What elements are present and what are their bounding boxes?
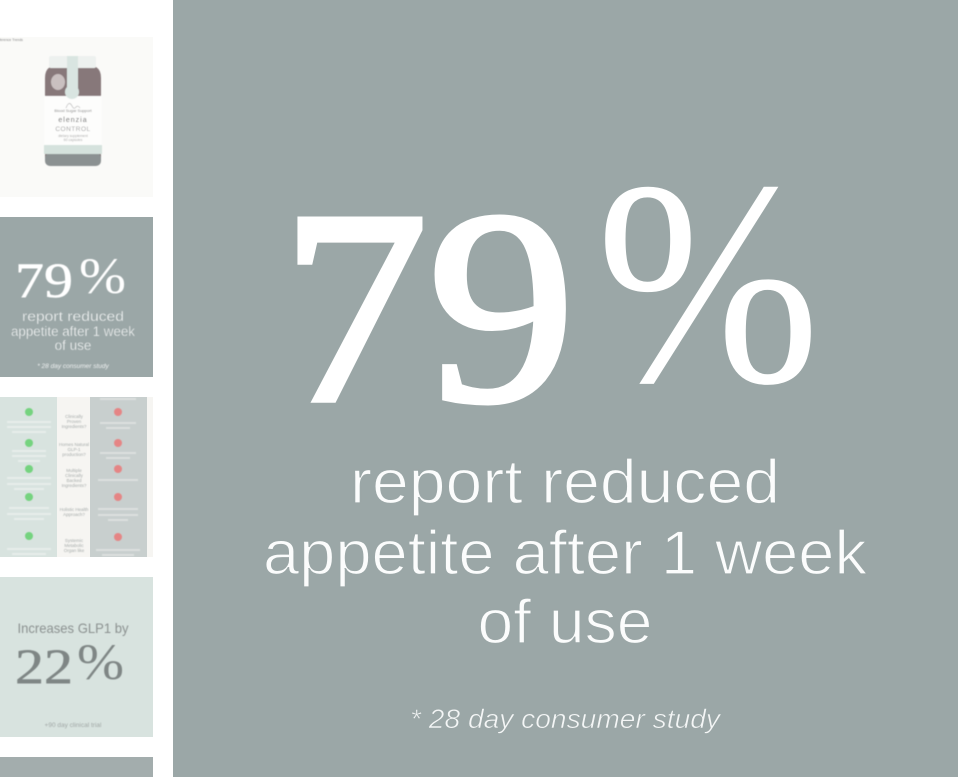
panel: 79% thumbnail: % bbox=[79, 249, 126, 305]
big number: 79 bbox=[281, 154, 575, 460]
icon: supplement bottle: Blood Sugar Support bbox=[54, 108, 92, 113]
panel: product thumbnail bbox=[0, 37, 153, 197]
icon: supplement bottle bbox=[44, 56, 102, 166]
middle column labels: Organ like bbox=[64, 548, 85, 553]
middle column labels: Multiple bbox=[66, 468, 82, 473]
icon column: red crosses bbox=[114, 408, 122, 541]
middle column labels: Homes Natural bbox=[59, 442, 89, 447]
middle column labels: Metabolic bbox=[64, 543, 84, 548]
footnote: * 28 day consumer study bbox=[410, 704, 722, 734]
panel: 79% thumbnail: * 28 day consumer study bbox=[37, 363, 110, 370]
icon: supplement bottle: elenzia bbox=[58, 117, 88, 124]
middle column labels: Ingredients? bbox=[62, 424, 87, 429]
big number: % bbox=[596, 122, 820, 445]
faint row text bars bbox=[7, 421, 51, 555]
panel: 79% thumbnail bbox=[0, 217, 153, 377]
middle column labels: Systemic bbox=[65, 538, 84, 543]
icon column: green checks bbox=[25, 408, 33, 540]
panel: 79% thumbnail: 79 bbox=[15, 252, 73, 308]
description: of use bbox=[478, 588, 652, 657]
icon: supplement bottle: CONTROL bbox=[55, 126, 91, 133]
panel: 22% thumbnail: 22 bbox=[15, 638, 73, 694]
panel: 22% thumbnail: % bbox=[77, 635, 124, 691]
panel: 79% thumbnail: of use bbox=[55, 338, 91, 353]
middle column labels: GLP-1 bbox=[67, 447, 81, 452]
big number bbox=[281, 122, 820, 460]
panel: 22% thumbnail bbox=[0, 577, 153, 737]
middle column labels: Backed bbox=[66, 478, 82, 483]
panel: next thumbnail (cropped) bbox=[0, 757, 153, 777]
icon: supplement bottle: 60 capsules bbox=[64, 138, 83, 142]
middle column labels: Holistic Health bbox=[60, 507, 89, 512]
description bbox=[263, 448, 868, 657]
description: appetite after 1 week bbox=[263, 519, 868, 588]
middle column labels: production? bbox=[62, 452, 86, 457]
panel: comparison table thumbnail bbox=[0, 397, 153, 557]
middle column labels: Ingredients? bbox=[62, 483, 87, 488]
icon: supplement bottle: dietary supplement bbox=[58, 134, 88, 138]
panel: 22% thumbnail: Increases GLP1 by bbox=[18, 620, 128, 636]
description: report reduced bbox=[350, 448, 780, 517]
middle column labels: Proven bbox=[67, 419, 82, 424]
panel: 79% thumbnail: report reduced bbox=[22, 309, 124, 324]
panel: 79% thumbnail: appetite after 1 week bbox=[11, 324, 135, 339]
middle column labels: Clinically bbox=[65, 473, 84, 478]
middle column labels: Approach? bbox=[63, 512, 85, 517]
middle column labels bbox=[59, 414, 89, 553]
middle column labels: Clinically bbox=[65, 414, 84, 419]
panel: 22% thumbnail: +90 day clinical trial bbox=[45, 722, 102, 729]
